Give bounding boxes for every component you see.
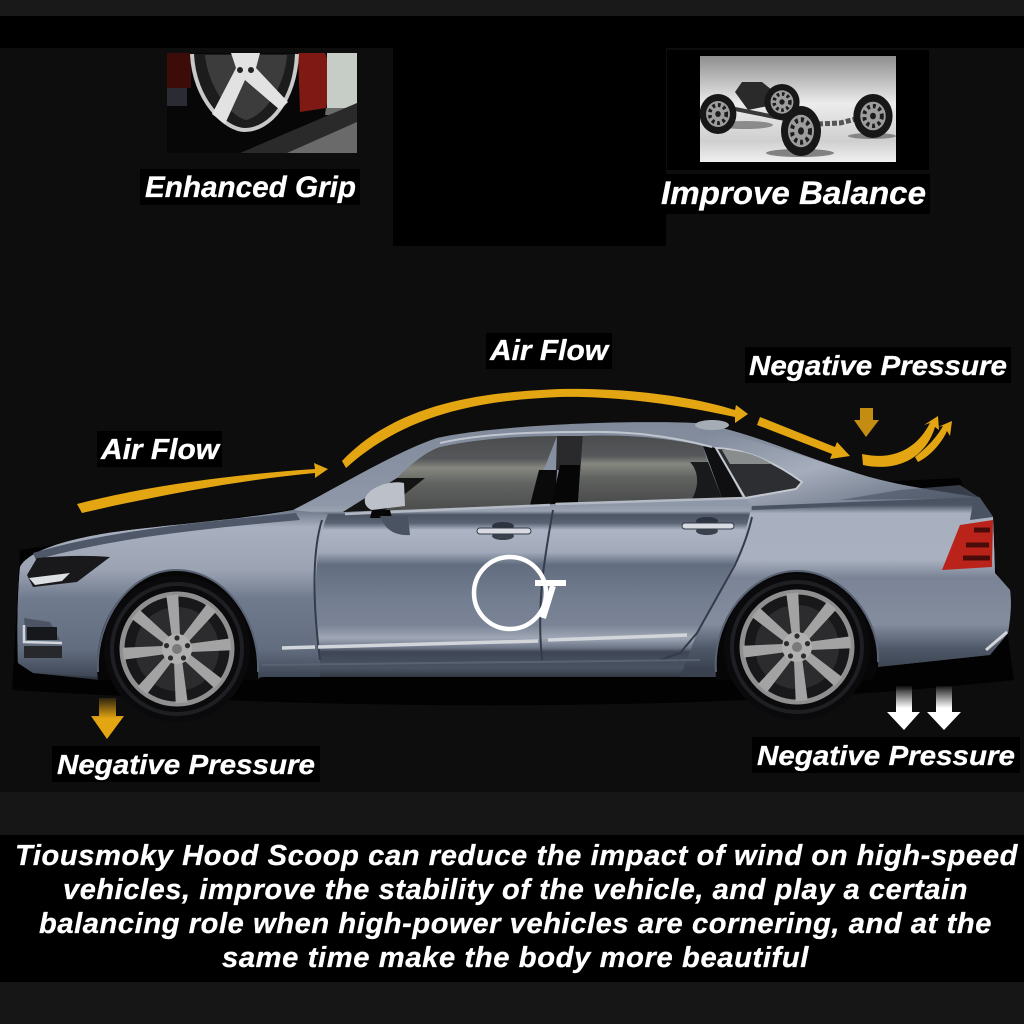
rear wheel <box>724 574 870 720</box>
label: improve balance: Improve Balance <box>661 175 926 211</box>
panel: enhanced grip <box>140 53 360 205</box>
arrow: deck air flow <box>862 416 939 467</box>
shoulder line <box>752 499 980 508</box>
windows <box>343 435 802 514</box>
arrow: rear pressure right <box>927 686 961 730</box>
car shadow <box>12 478 1014 705</box>
label: air flow top: Air Flow <box>489 335 611 367</box>
arrow: rear roof air flow <box>757 417 850 459</box>
white circle marker <box>474 557 566 629</box>
trunk edge <box>970 498 993 520</box>
air flow arrows <box>77 389 952 739</box>
tail light <box>942 520 993 570</box>
label: negative pressure rear: Negative Pressure <box>757 740 1015 771</box>
roof rail <box>440 432 712 447</box>
door handles <box>477 517 734 540</box>
caption text block: balancing role when high-power vehicles are cornering, and at the <box>39 908 992 940</box>
c-pillar and deck <box>700 430 980 507</box>
arrow: top pressure <box>854 408 879 437</box>
mirror <box>365 482 410 535</box>
caption text block <box>0 835 1024 982</box>
arrow: front pressure <box>91 698 124 739</box>
label: enhanced grip: Enhanced Grip <box>145 171 356 204</box>
front wheel <box>104 576 250 722</box>
chrome trim <box>282 635 687 648</box>
car illustration <box>17 420 1011 722</box>
panel: improve balance <box>656 50 930 214</box>
photo: alloy wheel <box>167 53 357 153</box>
rocker line <box>262 660 700 665</box>
hood crease <box>33 513 300 560</box>
arrow: front air flow <box>77 463 328 513</box>
caption text block: vehicles, improve the stability of the vehicle, and play a certain <box>63 874 968 906</box>
arrow: rear pressure left <box>887 686 920 730</box>
car body <box>17 422 1011 680</box>
window sill chrome <box>345 498 745 514</box>
rear quarter <box>680 498 1011 677</box>
caption text block: same time make the body more beautiful <box>222 942 809 974</box>
front bumper vent <box>24 618 62 658</box>
caption text block: Tiousmoky Hood Scoop can reduce the impact of wind on high-speed <box>15 840 1019 872</box>
label: negative pressure front: Negative Pressure <box>57 749 315 780</box>
label: air flow left: Air Flow <box>100 434 222 466</box>
roof fin <box>695 420 729 430</box>
front fender <box>17 510 328 677</box>
photo: chassis <box>667 50 929 170</box>
label: negative pressure top: Negative Pressure <box>749 350 1007 381</box>
rear diffuser <box>986 632 1007 650</box>
headlight <box>27 556 110 587</box>
wheel arches <box>97 570 878 680</box>
arrow: roof air flow <box>342 389 748 468</box>
door lines <box>314 510 752 660</box>
